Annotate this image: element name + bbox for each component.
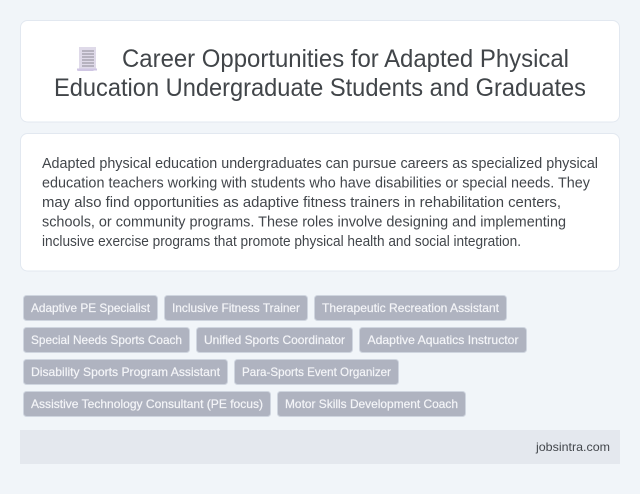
tag: Unified Sports Coordinator <box>204 333 345 347</box>
title: Career Opportunities for Adapted Physical <box>122 45 569 73</box>
panel: description <box>20 134 620 271</box>
text block: description: Adapted physical education undergraduates can pursue careers as specialized physical <box>42 156 598 172</box>
footer source text: jobsintra.com <box>535 440 610 454</box>
tag: Adaptive PE Specialist <box>31 301 151 315</box>
tag: Para-Sports Event Organizer <box>242 365 391 379</box>
icon: document scroll <box>77 47 97 71</box>
tag list <box>24 296 526 416</box>
panel: title card <box>20 20 620 122</box>
tag: Therapeutic Recreation Assistant <box>322 301 500 315</box>
tag <box>24 296 158 320</box>
tag: Inclusive Fitness Trainer <box>172 301 300 315</box>
tag: Adaptive Aquatics Instructor <box>368 333 518 347</box>
tag: Special Needs Sports Coach <box>31 333 182 347</box>
tag <box>164 296 308 320</box>
text block: description: education teachers working with students who have disabilities or special needs. They <box>42 176 591 192</box>
tag <box>234 360 398 384</box>
footer <box>20 430 620 464</box>
tag <box>360 328 526 352</box>
text block: description: inclusive exercise programs that promote physical health and social integration. <box>42 234 521 250</box>
title: Education Undergraduate Students and Graduates <box>54 74 586 102</box>
tag: Assistive Technology Consultant (PE focus) <box>31 397 263 411</box>
text block: description <box>42 156 598 250</box>
tag <box>24 360 228 384</box>
tag <box>196 328 352 352</box>
text block: description: may also find opportunities as adaptive fitness trainers in rehabilitation centers, <box>42 195 561 211</box>
tag: Motor Skills Development Coach <box>285 397 458 411</box>
tag <box>278 392 466 416</box>
tag <box>314 296 506 320</box>
tag <box>24 392 270 416</box>
title <box>54 45 586 102</box>
tag: Disability Sports Program Assistant <box>31 365 221 379</box>
text block: description: schools, or community programs. These roles involve designing and implementing <box>42 214 566 230</box>
tag <box>24 328 190 352</box>
